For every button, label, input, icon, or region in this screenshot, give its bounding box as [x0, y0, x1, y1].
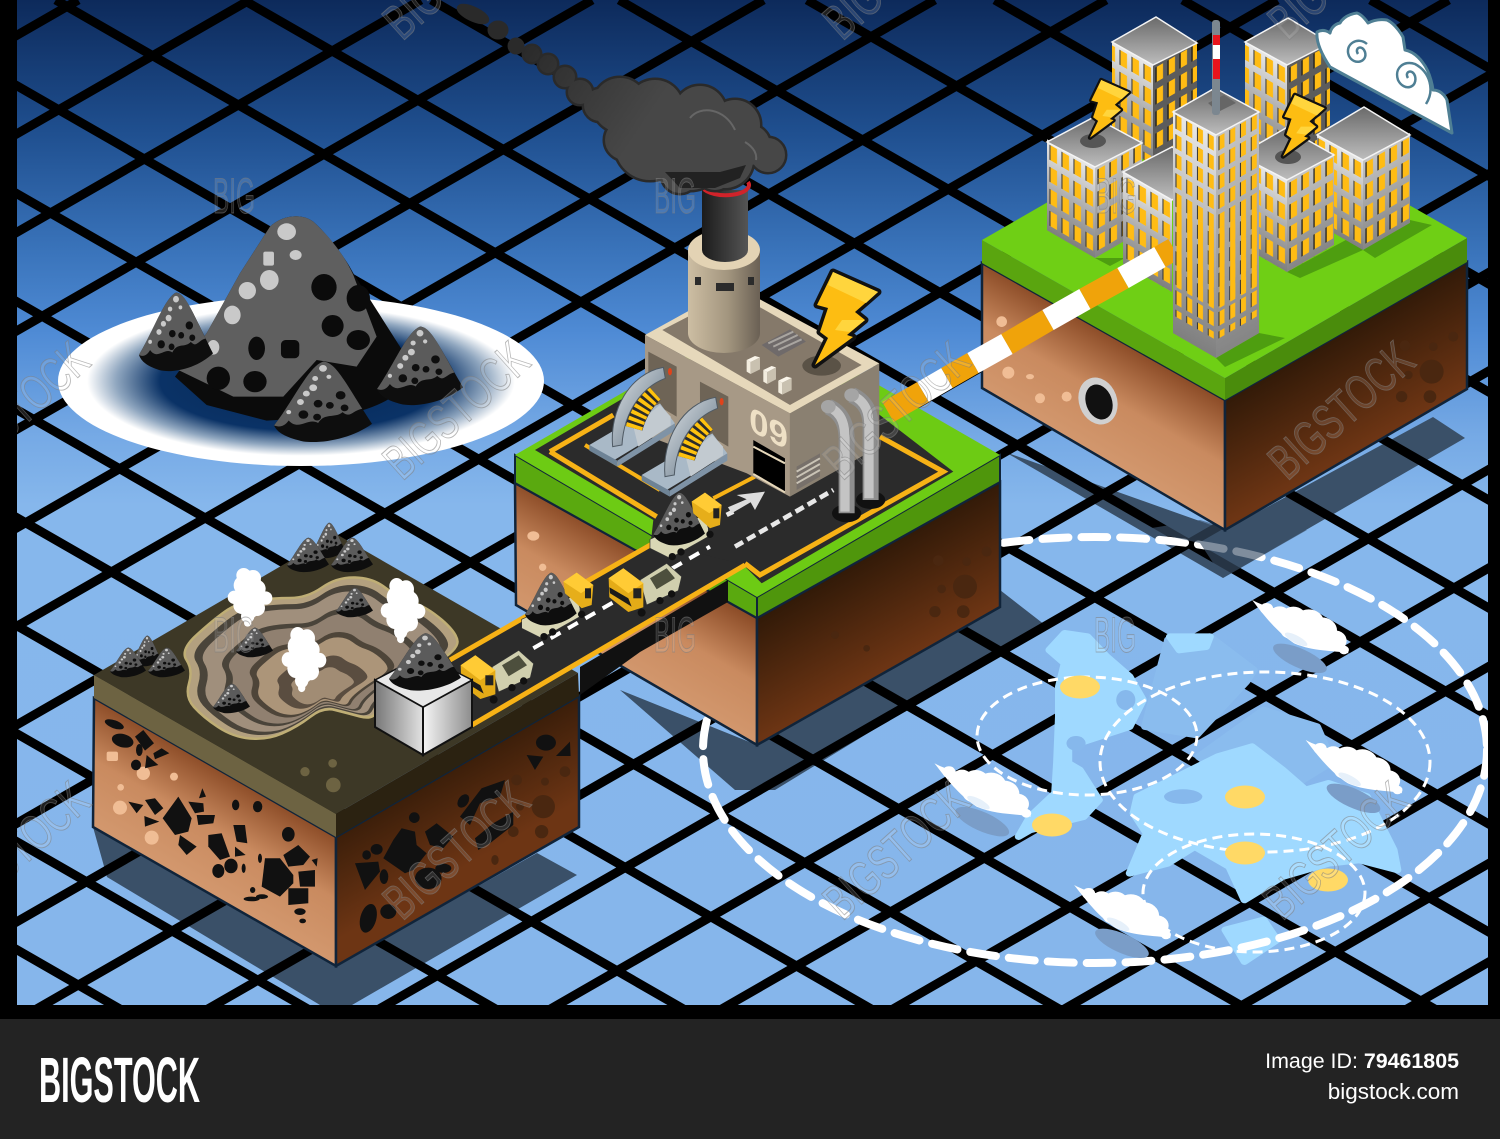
red chimney ring [703, 182, 749, 195]
white ring lake [58, 296, 544, 466]
factory building [589, 286, 885, 522]
big coal mound [175, 216, 417, 421]
text: BIGSTOCK [39, 1044, 200, 1116]
low middle building [1123, 147, 1218, 292]
roof rim [645, 286, 879, 413]
trucks on road [461, 493, 722, 704]
power station block [515, 315, 1000, 745]
loaded truck on road [522, 573, 593, 640]
stock watermarks: BIGSTOCK [1257, 331, 1425, 490]
red lights [668, 368, 724, 405]
coal mound on lake [58, 216, 544, 466]
roof cubes [747, 356, 792, 395]
yellow city markers [1032, 676, 1348, 892]
footer bar [0, 1019, 1500, 1139]
city soil sides [982, 262, 1467, 530]
underside of the road bridge [580, 580, 728, 695]
factory lightning bolt [815, 272, 878, 365]
loaded truck near factory [650, 493, 722, 560]
stock watermarks: BIGSTOCK [812, 331, 980, 490]
tower top ring [688, 230, 760, 270]
smokestack tower [688, 182, 760, 353]
empty truck near mine [461, 650, 534, 704]
steam plumes [228, 568, 425, 692]
smoke plume [457, 3, 785, 193]
small coal piles around mound [139, 293, 463, 442]
open pit mine terraces [185, 577, 458, 739]
asphalt yard [535, 320, 953, 583]
stock watermarks: BIGSTOCK [812, 771, 980, 930]
small white clouds [934, 600, 1402, 964]
bolt base [802, 356, 841, 376]
world map with transport routes [703, 520, 1487, 964]
power cable [888, 249, 1174, 412]
stock watermarks: BIGSTOCK [372, 331, 540, 490]
outer thick dashed orbit [703, 537, 1487, 963]
back-left tower [1112, 17, 1197, 165]
mine top surface [94, 534, 578, 814]
stock watermarks: BIGSTOCK [372, 771, 540, 930]
coal piles on mine [110, 523, 373, 713]
city block [982, 100, 1467, 530]
city lightning bolts [1090, 80, 1325, 156]
stock watermarks: BIG [1094, 607, 1136, 663]
roof inner [662, 293, 862, 405]
pipe hole [1072, 372, 1124, 430]
mine block [93, 523, 579, 966]
block soil sides [515, 482, 1000, 745]
soil stones [527, 531, 992, 652]
concrete tower [688, 250, 760, 353]
dashed route ellipses [977, 672, 1430, 952]
wall louvre [797, 453, 820, 490]
main skyscraper [1173, 88, 1259, 358]
alcoves [648, 352, 728, 447]
building shadows on grass [1095, 220, 1432, 367]
green top [515, 315, 1000, 618]
white spiral cloud [1317, 13, 1452, 133]
stock watermarks: BIG [213, 168, 255, 224]
turbine intakes [589, 367, 727, 497]
footer site url: bigstock.com [1328, 1079, 1459, 1104]
stock watermarks [0, 0, 1425, 930]
orbit section in city shadow [1140, 520, 1307, 578]
door [753, 440, 785, 492]
chimney [702, 190, 748, 262]
ground shadows of the three blocks [93, 417, 1465, 1005]
coal seams and stones [104, 717, 571, 935]
stock watermarks: BIGSTOCK [1252, 771, 1420, 930]
front-left building [1047, 117, 1142, 258]
left wall [645, 335, 790, 497]
stock watermarks: BIG [213, 607, 255, 663]
map continents [1019, 633, 1398, 962]
roof vent [762, 329, 806, 357]
building number: 09 [749, 398, 788, 458]
tower slits [695, 277, 754, 291]
road with yellow edges [450, 490, 833, 725]
city soil stones [996, 316, 1458, 403]
mine soil sides [93, 696, 579, 966]
stock watermarks: BIG [1095, 168, 1137, 224]
coal hopper cube with pile [375, 633, 472, 755]
stock watermarks: BIG [654, 168, 696, 224]
grass top [982, 100, 1467, 400]
right wall [790, 363, 879, 497]
back-right tower [1245, 18, 1330, 165]
right-middle building [1239, 128, 1334, 272]
stock watermarks: BIG [654, 607, 696, 663]
far-right building [1317, 107, 1410, 250]
footer image id: Image ID: 79461805 [1265, 1049, 1459, 1073]
mine top stripes [94, 673, 579, 837]
empty truck facing viewer [609, 563, 682, 617]
antenna [1212, 20, 1220, 115]
exhaust pipes [821, 388, 885, 522]
